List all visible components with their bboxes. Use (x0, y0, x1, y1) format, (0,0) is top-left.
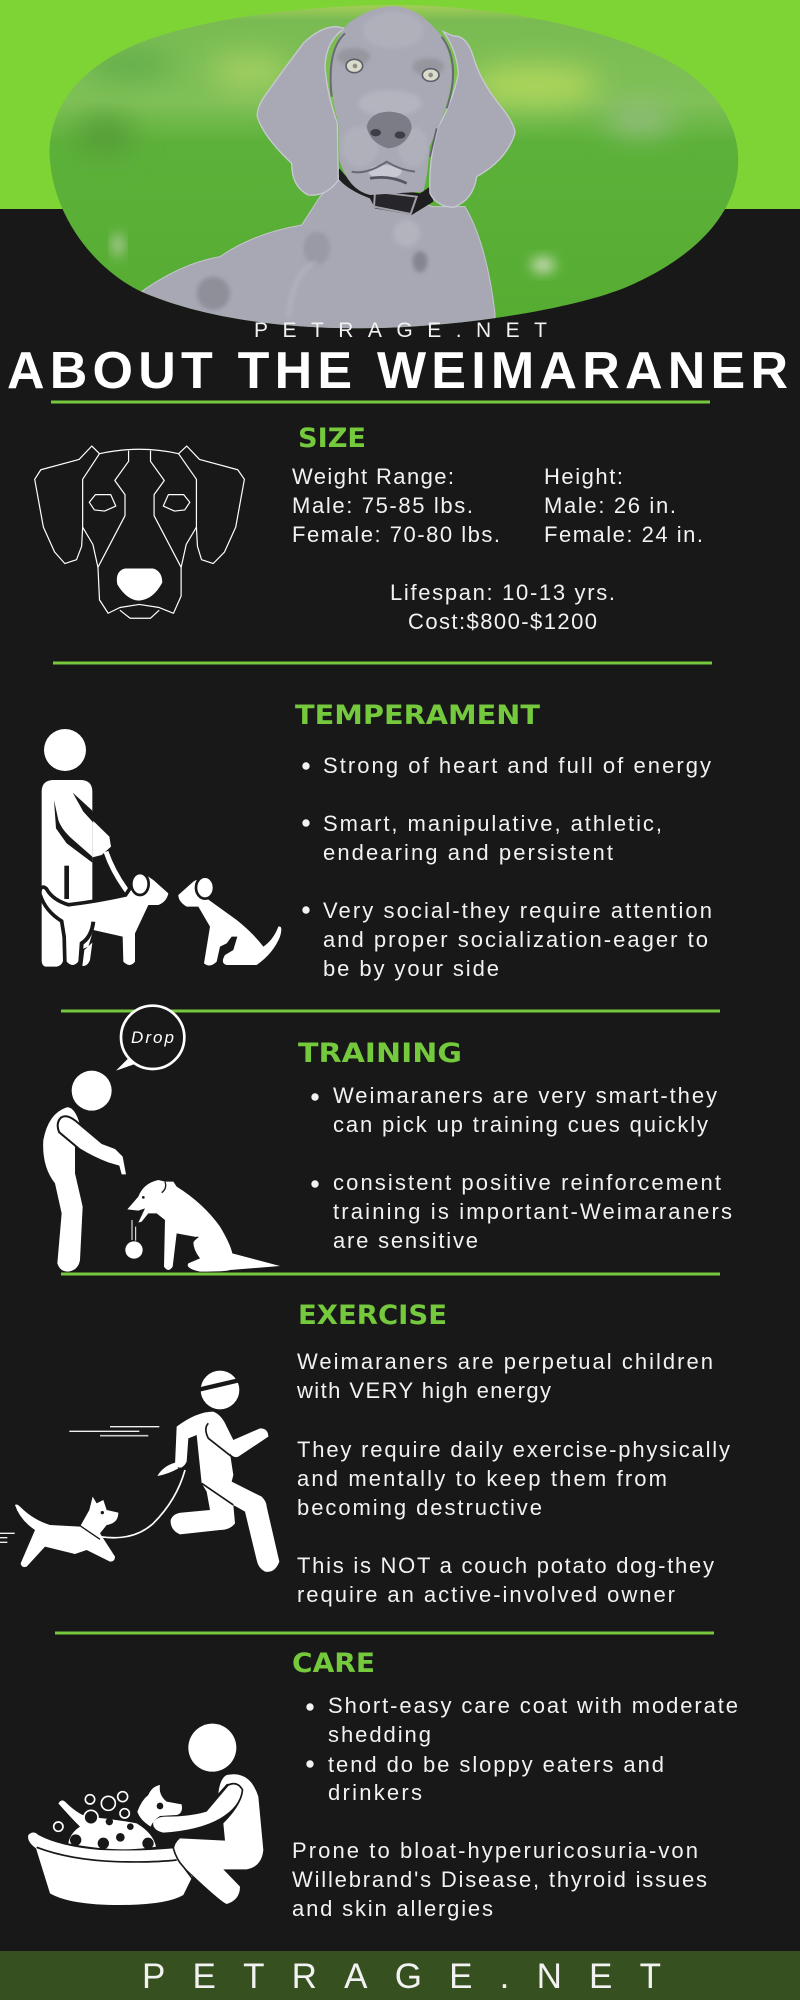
training bullets: can pick up training cues quickly (333, 1112, 708, 1137)
exercise text: This is NOT a couch potato dog-they (297, 1553, 714, 1578)
training bullets: training is important-Weimaraners (333, 1199, 732, 1224)
temperament bullets (302, 753, 712, 981)
care health note: Willebrand's Disease, thyroid issues (292, 1867, 707, 1892)
heading: size: SIZE (298, 423, 366, 454)
height column: Height: (544, 464, 623, 489)
green header band (0, 0, 800, 209)
exercise text: and mentally to keep them from (297, 1466, 667, 1491)
temperament bullets: be by your side (323, 956, 499, 981)
panel: exercise (0, 1300, 730, 1607)
care bullets: drinkers (328, 1780, 422, 1805)
photo: weimaraner puppy on grass (40, 0, 760, 340)
height column: Male: 26 in. (544, 493, 676, 518)
care health note: and skin allergies (292, 1896, 493, 1921)
care bullets: Short-easy care coat with moderate (328, 1693, 738, 1718)
nose (367, 112, 412, 148)
temperament bullets: and proper socialization-eager to (323, 927, 708, 952)
heading: care: CARE (292, 1648, 375, 1679)
icon: dog face outline (35, 446, 244, 618)
icon: person commanding dog with speech bubble (43, 1006, 280, 1272)
training bullets (311, 1083, 732, 1253)
right ear (430, 32, 515, 207)
icon: person commanding dog with speech bubble: Drop (131, 1028, 174, 1047)
height column (544, 464, 703, 547)
collar (337, 168, 433, 215)
exercise text: with VERY high energy (296, 1378, 551, 1403)
icon: person walking dog meeting another dog (42, 729, 281, 967)
heading: training: TRAINING (298, 1038, 462, 1069)
care health note: Prone to bloat-hyperuricosuria-von (292, 1838, 698, 1863)
care bullets: shedding (328, 1722, 431, 1747)
exercise text: require an active-involved owner (297, 1582, 675, 1607)
heading: temperament: TEMPERAMENT (295, 700, 541, 731)
temperament bullets: Strong of heart and full of energy (323, 753, 711, 778)
panel: size (35, 423, 703, 634)
left ear (257, 27, 345, 195)
weight column: Weight Range: (292, 464, 454, 489)
temperament bullets: Very social-they require attention (323, 898, 712, 923)
head (332, 6, 452, 195)
weight column: Male: 75-85 lbs. (292, 493, 473, 518)
training bullets: are sensitive (333, 1228, 478, 1253)
title: ABOUT THE WEIMARANER (7, 342, 788, 400)
icon: person bathing dog in tub (28, 1724, 263, 1905)
mouth (368, 165, 402, 178)
care health note (292, 1838, 707, 1921)
exercise text: They require daily exercise-physically (297, 1437, 730, 1462)
weight column: Female: 70-80 lbs. (292, 522, 500, 547)
footer brand: PETRAGE.NET (142, 1957, 661, 1996)
lifespan and cost (390, 580, 615, 634)
training bullets: Weimaraners are very smart-they (333, 1083, 717, 1108)
height column: Female: 24 in. (544, 522, 703, 547)
exercise text (296, 1349, 730, 1607)
temperament bullets: endearing and persistent (323, 840, 613, 865)
icon: person running with dog on leash (0, 1371, 279, 1572)
training bullets: consistent positive reinforcement (333, 1170, 721, 1195)
care bullets (306, 1693, 738, 1805)
lifespan and cost: Cost:$800-$1200 (408, 609, 597, 634)
temperament bullets: Smart, manipulative, athletic, (323, 811, 662, 836)
panel: temperament (42, 700, 712, 981)
lifespan and cost: Lifespan: 10-13 yrs. (390, 580, 615, 605)
dog body (137, 180, 495, 337)
eyes (346, 59, 363, 73)
brand line: PETRAGE.NET (254, 319, 547, 342)
heading: exercise: EXERCISE (298, 1300, 447, 1331)
panel: training (43, 1006, 732, 1272)
panel: care (28, 1648, 738, 1921)
exercise text: Weimaraners are perpetual children (297, 1349, 713, 1374)
care bullets: tend do be sloppy eaters and (328, 1752, 664, 1777)
footer band (0, 1951, 800, 2000)
weight column (292, 464, 500, 547)
exercise text: becoming destructive (297, 1495, 542, 1520)
